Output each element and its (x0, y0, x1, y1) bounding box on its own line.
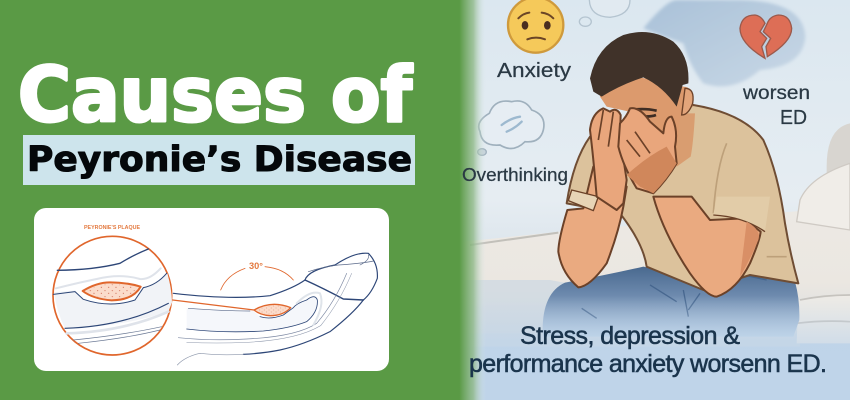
plaque close-up stippling (87, 284, 137, 298)
icon: broken heart (740, 15, 792, 58)
left sleeve cuff and forearm (558, 167, 627, 287)
jeans (543, 267, 799, 337)
plaque close-up (83, 282, 141, 300)
caption line 1: Stress, depression & (520, 322, 740, 350)
lower blue fade (450, 296, 850, 400)
icon: overthinking cloud (478, 101, 544, 155)
bed and pillows (463, 123, 850, 347)
small thought bubbles (579, 0, 630, 26)
icon: worried face emoji (508, 0, 563, 53)
panel: illustration of distressed man (449, 0, 850, 400)
label: ED: ED (780, 107, 807, 129)
label: worsen: worsen (742, 83, 810, 104)
label: 30 degrees: 30° (249, 261, 263, 271)
right sleeve cuff and forearm (653, 197, 770, 297)
thought cloud behind head (643, 0, 805, 86)
shirt (567, 105, 798, 290)
magnified circle (53, 236, 172, 355)
subtitle: Peyronie's Disease: Peyronie’s Disease (27, 140, 412, 180)
panel: medical diagram card (34, 208, 389, 371)
caption line 2: performance anxiety worsenn ED. (469, 350, 827, 378)
label: Anxiety: Anxiety (497, 60, 571, 82)
green fade over illustration edge (449, 0, 486, 400)
label: Peyronie's plaque: PEYRONIE’S PLAQUE (84, 225, 140, 231)
shaft outline (173, 253, 377, 365)
plaque stippling (257, 305, 288, 314)
title: Causes of: Causes of (18, 50, 413, 139)
label: Overthinking: Overthinking (462, 164, 568, 185)
hair (590, 32, 688, 107)
plaque on shaft (254, 304, 291, 316)
connector line (173, 300, 254, 310)
neck (663, 113, 695, 167)
hands covering face (590, 108, 677, 210)
head and face (590, 32, 693, 150)
angle arc (221, 267, 293, 290)
